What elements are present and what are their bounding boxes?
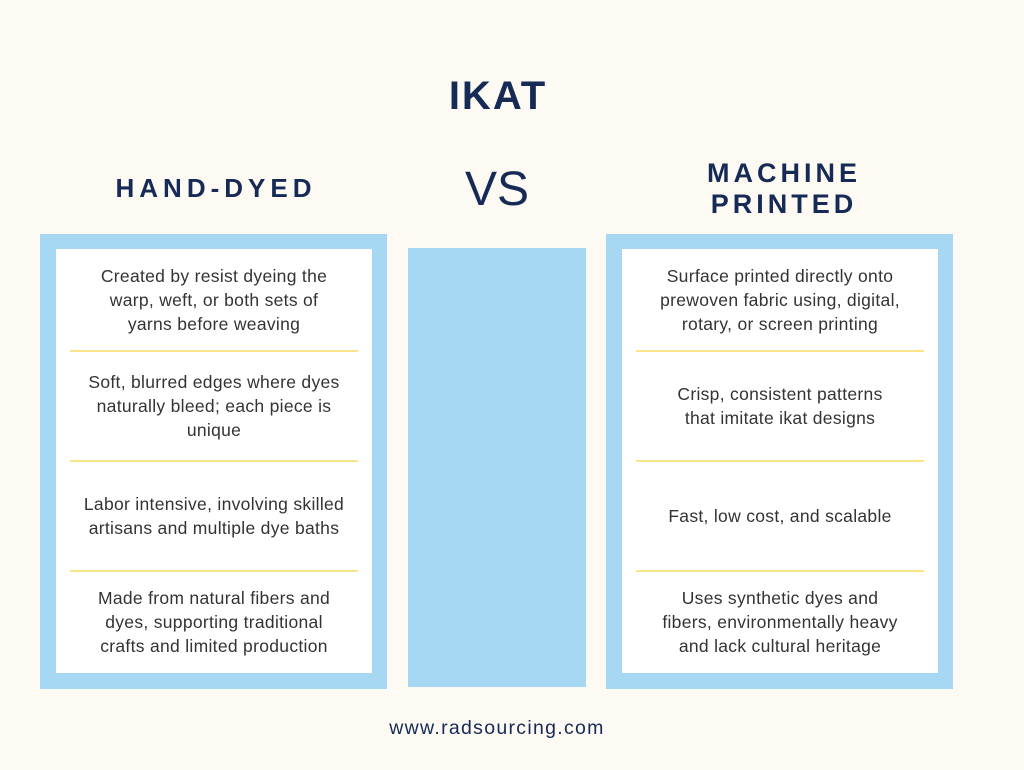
vs label: VS (465, 163, 529, 216)
center bar (408, 248, 586, 687)
text: machine 1 (660, 266, 900, 334)
heading: machine printed: PRINTED (711, 189, 857, 219)
panel: machine printed (606, 234, 953, 689)
text: hand-dyed 1: Created by resist dyeing the (101, 266, 327, 286)
text: machine 1: Surface printed directly onto (667, 266, 893, 286)
heading: machine printed: MACHINE (707, 158, 861, 188)
text: hand-dyed 4: crafts and limited production (100, 636, 328, 656)
text: hand-dyed 4: dyes, supporting traditional (105, 612, 323, 632)
title: IKAT (449, 74, 547, 118)
text: hand-dyed 2: Soft, blurred edges where dyes (88, 372, 340, 392)
text: machine 2 (677, 384, 883, 428)
heading: hand-dyed: HAND-DYED (116, 173, 316, 203)
text: hand-dyed 3: artisans and multiple dye baths (89, 518, 339, 538)
panel: hand-dyed (40, 234, 387, 689)
text: hand-dyed 1: warp, weft, or both sets of (110, 290, 318, 310)
text: hand-dyed 1 (101, 266, 327, 334)
text: hand-dyed 2: naturally bleed; each piece is (97, 396, 331, 416)
text: machine 3: Fast, low cost, and scalable (668, 506, 892, 526)
text: machine 4: and lack cultural heritage (679, 636, 881, 656)
text: hand-dyed 3 (84, 494, 344, 538)
text: hand-dyed 2: unique (187, 420, 241, 440)
text: machine 2: Crisp, consistent patterns (677, 384, 883, 404)
text: machine 1: rotary, or screen printing (682, 314, 878, 334)
text: machine 4: Uses synthetic dyes and (682, 588, 878, 608)
text: machine 1: prewoven fabric using, digital, (660, 290, 900, 310)
heading: machine printed (707, 158, 861, 219)
text: machine 4 (662, 588, 898, 656)
text: hand-dyed 4 (98, 588, 330, 656)
footer url: www.radsourcing.com (389, 717, 605, 739)
text: hand-dyed 2 (88, 372, 340, 440)
text: machine 2: that imitate ikat designs (685, 408, 875, 428)
text: hand-dyed 3: Labor intensive, involving skilled (84, 494, 344, 514)
text: machine 4: fibers, environmentally heavy (662, 612, 898, 632)
text: hand-dyed 1: yarns before weaving (128, 314, 300, 334)
text: hand-dyed 4: Made from natural fibers and (98, 588, 330, 608)
